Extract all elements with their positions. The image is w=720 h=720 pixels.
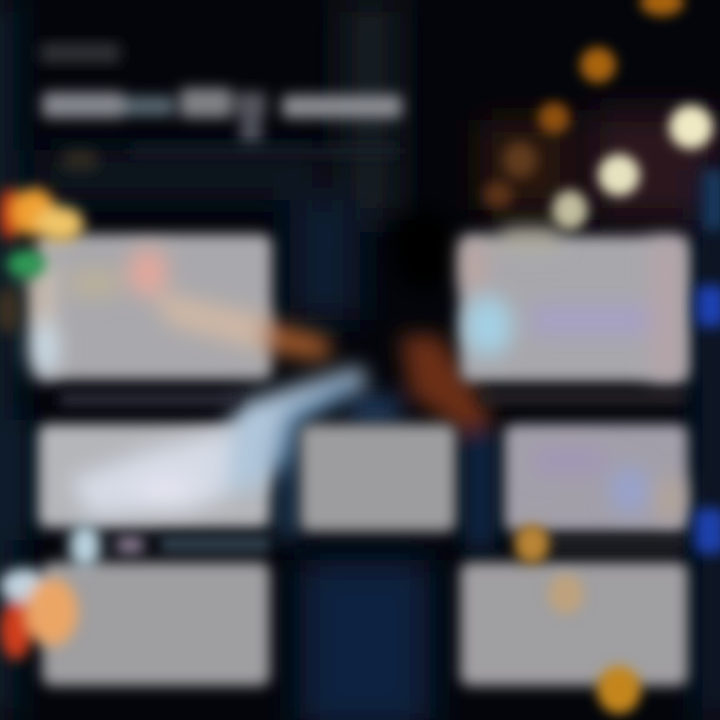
icon: bottom left colour blob bbox=[0, 524, 146, 660]
panel: middle right bbox=[504, 424, 688, 532]
icon: bottom gold lights bbox=[514, 524, 641, 714]
panel: top right bbox=[460, 228, 688, 382]
divider bands bbox=[60, 392, 685, 552]
arm highlight bbox=[28, 248, 330, 376]
figure: dancer silhouette bbox=[278, 208, 495, 550]
panel: middle centre bbox=[300, 424, 456, 532]
eyebrow bbox=[40, 43, 120, 63]
panel: top left bbox=[28, 234, 330, 380]
panel: bottom right bbox=[460, 562, 688, 686]
panel: middle left bbox=[38, 366, 368, 528]
panel: bottom left bbox=[42, 562, 270, 686]
heading group bbox=[40, 43, 402, 170]
icon: blue edge markers bbox=[694, 170, 720, 554]
icon: top left colour blob bbox=[0, 188, 84, 334]
title bbox=[42, 88, 402, 145]
subtitle bbox=[62, 146, 400, 170]
icon: bokeh lights top right bbox=[483, 0, 713, 230]
